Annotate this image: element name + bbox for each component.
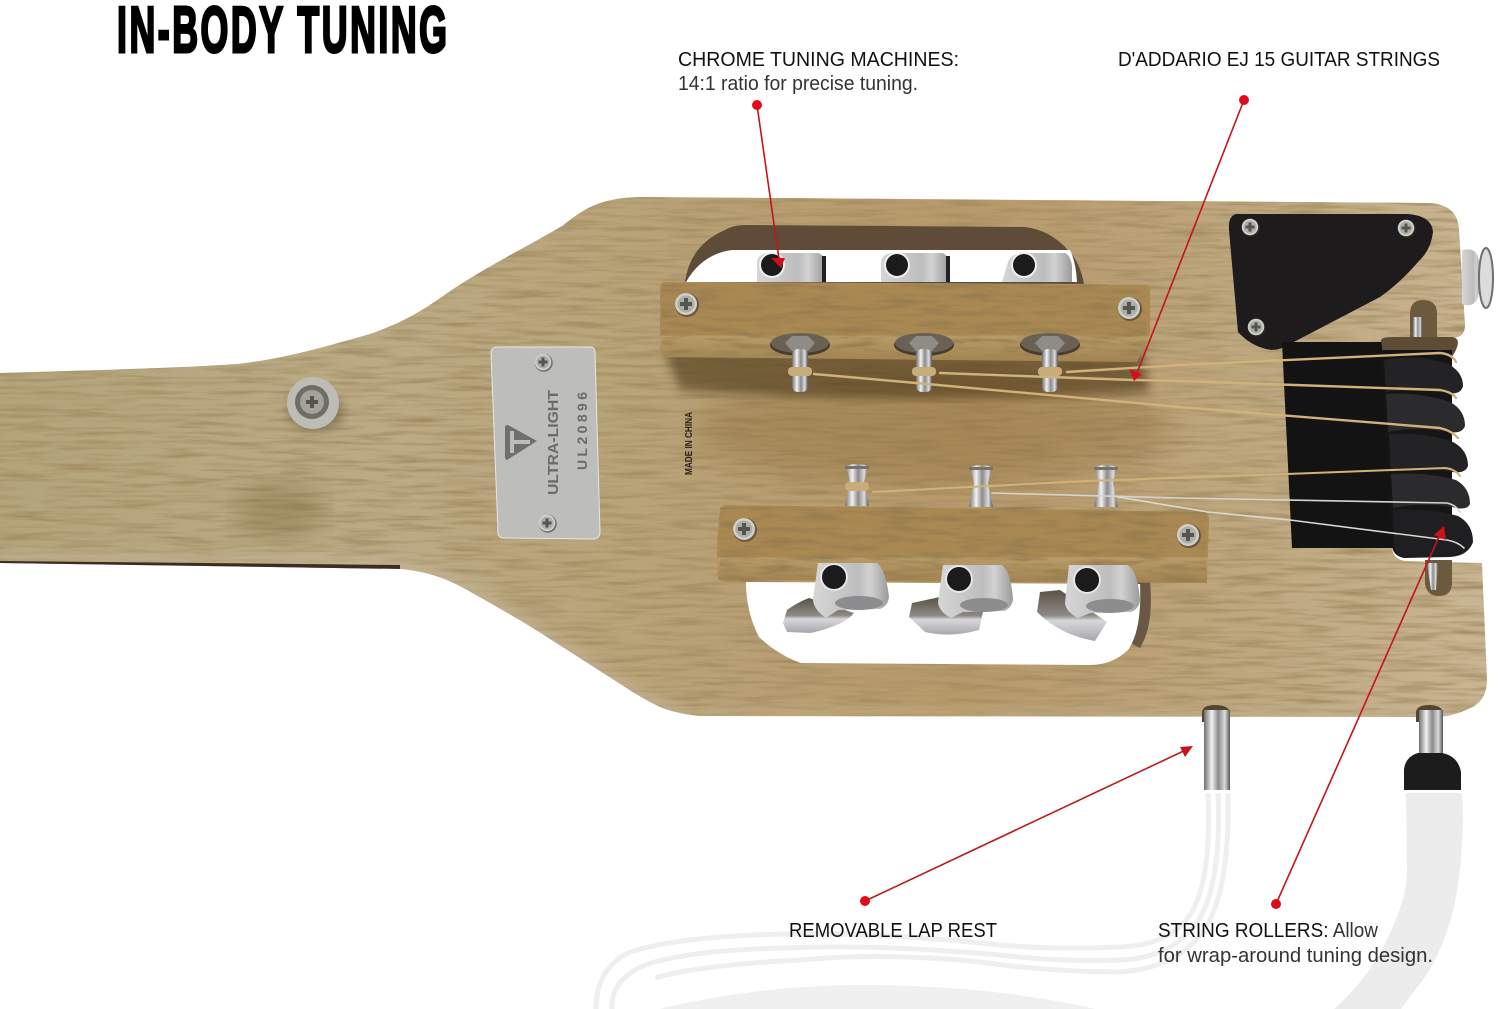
reflection: rubber foot (1334, 793, 1463, 1009)
block grain (720, 507, 1206, 582)
leader arrow (752, 100, 785, 268)
roller 2 (1386, 394, 1465, 432)
rubber foot (1404, 753, 1461, 790)
upper tuner opening (685, 225, 1084, 284)
rod: removable lap rest (1202, 705, 1230, 790)
callout body: for wrap-around tuning design. (1158, 945, 1433, 967)
callout: removable lap rest (789, 746, 1193, 942)
string 3 (814, 374, 1458, 438)
lower string pegs (845, 464, 1118, 507)
block screw left (675, 293, 699, 317)
chrome tuning machine 3 (1002, 252, 1072, 282)
callout: chrome tuning machines (678, 49, 959, 268)
machine 2 (909, 565, 1013, 635)
leader arrow (1129, 95, 1249, 381)
roller 3 (1389, 434, 1468, 472)
callout heading: CHROME TUNING MACHINES: (678, 49, 959, 71)
machine 1 (783, 563, 889, 633)
bottom slot rod (1427, 563, 1438, 590)
upper string pegs (770, 333, 1080, 392)
leader arrow (860, 746, 1193, 906)
block body (660, 282, 1150, 362)
rod: second support (1416, 705, 1443, 757)
chrome tuning machine 2 (881, 252, 950, 282)
opening: white see-through (686, 250, 1077, 282)
callout heading: D'ADDARIO EJ 15 GUITAR STRINGS (1118, 49, 1440, 71)
lower tuner opening (746, 582, 1151, 665)
roller slots (1410, 300, 1452, 596)
block grain (662, 284, 1146, 356)
guitar body (0, 190, 1500, 725)
upper wooden block (660, 282, 1150, 362)
callout: guitar strings (1118, 49, 1440, 381)
plate screw bottom (539, 515, 557, 533)
cavity wall (1381, 337, 1458, 360)
plate screw 3 (1248, 319, 1266, 337)
made in china stamp: MADE IN CHINA (683, 412, 695, 475)
guitar strings (814, 353, 1464, 548)
plate screw 2 (1398, 220, 1416, 238)
plate text: serial: UL20896 (574, 392, 590, 470)
pickup plate (1229, 214, 1433, 350)
peg 1 (845, 464, 869, 506)
opening rim (1120, 582, 1151, 648)
plate screw top (535, 354, 553, 372)
reflection: lap rest and floor (596, 793, 1463, 1009)
opening: dark inner wall (685, 225, 1084, 284)
callout body: 14:1 ratio for precise tuning. (678, 73, 918, 95)
lower chrome tuning machines (783, 563, 1140, 641)
block screw right (1177, 524, 1201, 548)
peg 1 (770, 333, 830, 392)
serial plate (491, 347, 600, 539)
reflection: floor blob (659, 985, 1096, 1009)
string 1 (1067, 353, 1456, 372)
block screw right (1118, 297, 1142, 321)
roller 1 (1384, 358, 1463, 393)
roller 4 (1391, 474, 1470, 508)
velcro pad (1282, 342, 1394, 548)
string 4 (873, 468, 1460, 492)
lower wooden block (717, 505, 1209, 583)
lap rest rods (1202, 705, 1461, 790)
block screw left (733, 518, 757, 542)
peg 1 winding (845, 482, 869, 491)
callout heading: STRING ROLLERS: Allow (1158, 920, 1379, 942)
wood grain and shading (0, 190, 1500, 725)
machine 3 (1037, 565, 1140, 641)
string 6 (1118, 497, 1464, 548)
top slot rod (1413, 317, 1422, 347)
plate screw 1 (1242, 219, 1260, 237)
leader arrow (1271, 526, 1446, 909)
peg 2 (969, 465, 993, 507)
top slot (1410, 300, 1437, 340)
string 2 (940, 373, 1456, 398)
string 5 (992, 493, 1460, 512)
neck screw (287, 377, 344, 432)
peg 3 (1020, 333, 1080, 392)
strap button (1462, 248, 1493, 308)
string rollers (1381, 337, 1473, 558)
callout heading: REMOVABLE LAP REST (789, 920, 997, 942)
opening: white see-through (746, 582, 1140, 665)
upper block shadow (664, 350, 1150, 399)
wood base (0, 197, 1487, 717)
chrome tuning machine 1 (757, 252, 826, 282)
roller backing (1381, 350, 1452, 558)
plate text: model: ULTRA-LIGHT (545, 390, 562, 495)
reflection: lap rest cable (596, 793, 1228, 1009)
callout: string rollers (1158, 526, 1446, 967)
logo (505, 425, 537, 460)
plate body (491, 347, 600, 539)
roller 5 (1393, 510, 1473, 558)
peg 3 (1094, 465, 1118, 507)
bottom slot (1425, 560, 1452, 596)
plate body (1229, 214, 1433, 350)
block body (717, 505, 1209, 583)
peg 2 (894, 333, 954, 392)
